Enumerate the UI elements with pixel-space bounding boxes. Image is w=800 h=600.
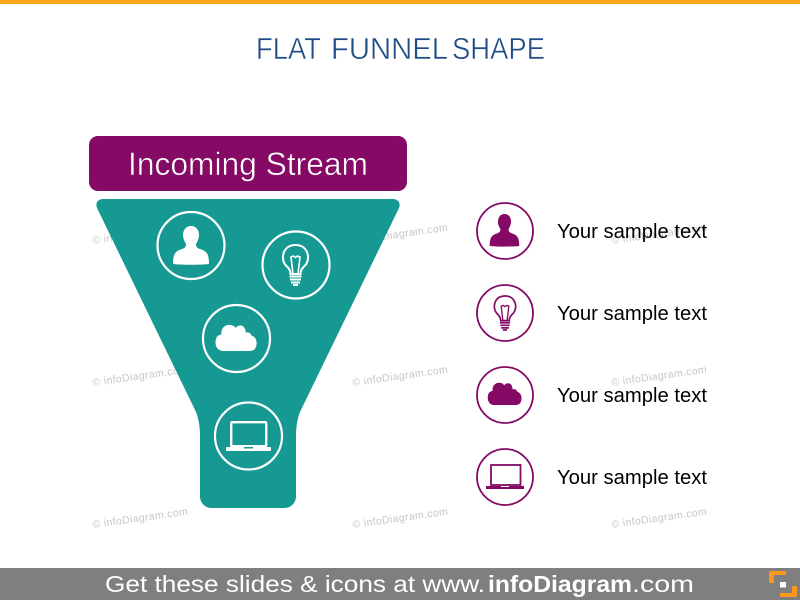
footer banner [0,568,800,600]
funnel icon: person [158,212,224,279]
watermarks: © infoDiagram.com [352,506,449,531]
watermarks: © infoDiagram.com [352,364,449,389]
list item 2: light bulb [477,285,707,341]
title: SHAPE [452,31,545,66]
funnel body [96,199,400,508]
watermarks: © infoDiagram.com [352,222,449,247]
footer text: Get these slides & icons at www. [105,571,485,597]
list item 1: person: Your sample text [557,221,707,243]
watermarks: © infoDiagram.com [92,506,189,531]
funnel header: Incoming Stream: Incoming Stream [128,146,368,182]
funnel icon: cloud [203,305,270,372]
list item 3: cloud: Your sample text [557,385,707,407]
watermarks: © infoDiagram.com [611,364,708,389]
list item 1: person [477,203,707,259]
top accent bar [0,0,800,4]
title: FUNNEL [331,31,448,66]
footer text: infoDiagram [488,571,632,597]
title: FLAT [256,31,321,66]
title [256,31,545,66]
funnel icon: laptop [215,402,282,470]
footer text: .com [632,571,694,597]
watermarks [92,222,708,531]
list item 4: laptop [477,449,707,505]
funnel icon: light bulb [262,232,330,298]
watermarks: © infoDiagram.com [92,222,189,247]
list item 3: cloud [477,367,707,423]
footer logo [769,571,797,597]
list item 4: laptop: Your sample text [557,467,707,489]
watermarks: © infoDiagram.com [611,222,708,247]
watermarks: © infoDiagram.com [92,364,189,389]
watermarks: © infoDiagram.com [611,506,708,531]
list item 2: light bulb: Your sample text [557,303,707,325]
funnel header: Incoming Stream [89,136,407,191]
footer text [105,571,694,597]
